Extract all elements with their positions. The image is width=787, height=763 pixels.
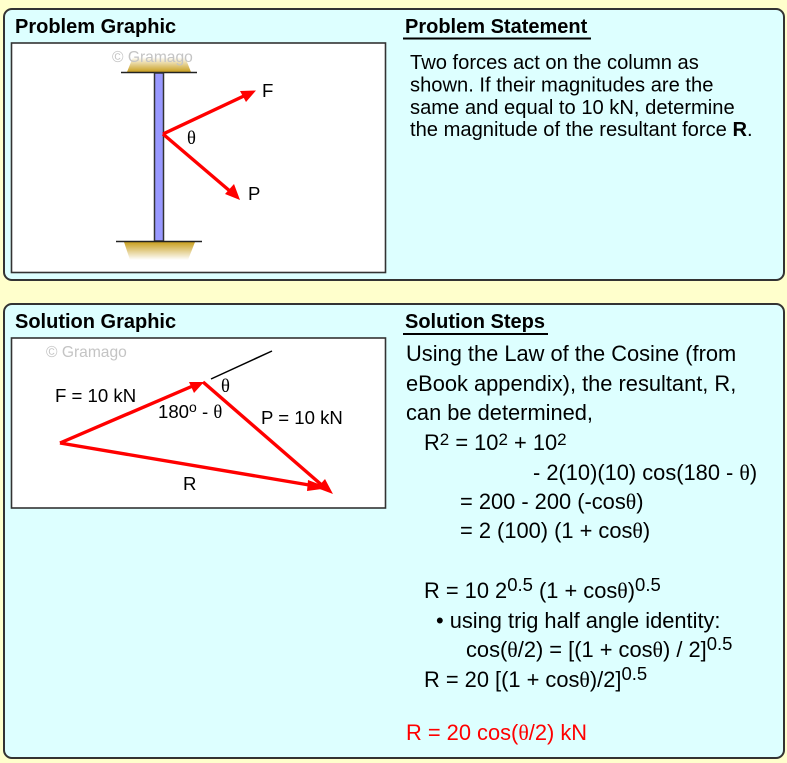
solution graphic: vector triangle <box>12 338 386 508</box>
heading: problem graphic: Problem Graphic <box>15 16 176 38</box>
problem statement text: shown. If their magnitudes are the <box>410 74 713 96</box>
equation: law of cosine: 2 <box>557 430 567 449</box>
panel: problem <box>4 9 784 280</box>
label angle: 180 <box>158 401 189 422</box>
equation: R: (1 + cos <box>533 578 617 603</box>
label angle: o <box>189 399 197 415</box>
equation: law of cosine: - 2(10)(10) cos(180 - θ) <box>533 460 757 485</box>
heading: solution graphic: Solution Graphic <box>15 311 176 333</box>
final answer: R = 20 cos(θ/2) kN <box>406 720 587 745</box>
equation: R: R = 10 2 <box>424 578 507 603</box>
trig identity note: • using trig half angle identity: <box>436 608 721 633</box>
panel: solution <box>4 304 784 758</box>
intro: eBook appendix), the resultant, R, <box>406 371 736 396</box>
label angle: - <box>197 401 213 422</box>
label theta: θ <box>221 376 230 397</box>
equation: R: 0.5 <box>507 574 533 595</box>
watermark: © Gramago <box>112 49 193 66</box>
problem statement text: Two forces act on the column as <box>410 52 699 74</box>
arrow: force F <box>163 90 256 134</box>
equation: R: 0.5 <box>635 574 661 595</box>
intro: can be determined, <box>406 400 593 425</box>
trig identity note: cos(θ/2) = [(1 + cosθ) / 2] <box>466 637 707 662</box>
equation: law of cosine: = 200 - 200 (-cosθ) <box>460 489 644 514</box>
problem statement text: same and equal to 10 kN, determine <box>410 97 735 119</box>
trig identity note <box>436 608 732 662</box>
equation: R: θ) <box>617 578 635 603</box>
arrow: P vector <box>203 382 333 494</box>
watermark: © Gramago <box>46 344 127 361</box>
equation: law of cosine: R <box>424 430 440 455</box>
label F: F = 10 kN <box>55 385 136 406</box>
reference line <box>211 351 272 379</box>
problem graphic: column with two forces <box>12 43 386 272</box>
equation: law of cosine: + 10 <box>508 430 557 455</box>
heading: solution steps: Solution Steps <box>405 311 545 333</box>
heading: problem statement: Problem Statement <box>405 16 588 38</box>
trig identity note: 0.5 <box>707 633 732 654</box>
equation: law of cosine: = 10 <box>449 430 498 455</box>
equation: R substituted: 0.5 <box>621 663 647 684</box>
label theta: θ <box>187 128 196 149</box>
label angle: θ <box>213 402 222 423</box>
problem statement text: the magnitude of the resultant force R. <box>410 119 753 141</box>
arrow: force P <box>163 134 240 200</box>
arrow: R vector <box>60 443 329 491</box>
equation: law of cosine <box>424 430 757 543</box>
label P: P <box>248 183 260 204</box>
label F: F <box>262 80 273 101</box>
equation: R substituted: R = 20 [(1 + cosθ)/2] <box>424 667 621 692</box>
label R: R <box>183 473 196 494</box>
solution steps text <box>406 341 757 745</box>
equation: law of cosine: = 2 (100) (1 + cosθ) <box>460 518 650 543</box>
column <box>154 73 164 241</box>
equation: law of cosine: 2 <box>498 430 508 449</box>
bottom support <box>116 242 202 260</box>
label P: P = 10 kN <box>261 407 343 428</box>
top support <box>121 57 197 72</box>
arrow: F vector <box>60 382 204 443</box>
equation: law of cosine: 2 <box>440 430 449 449</box>
intro: Using the Law of the Cosine (from <box>406 341 736 366</box>
